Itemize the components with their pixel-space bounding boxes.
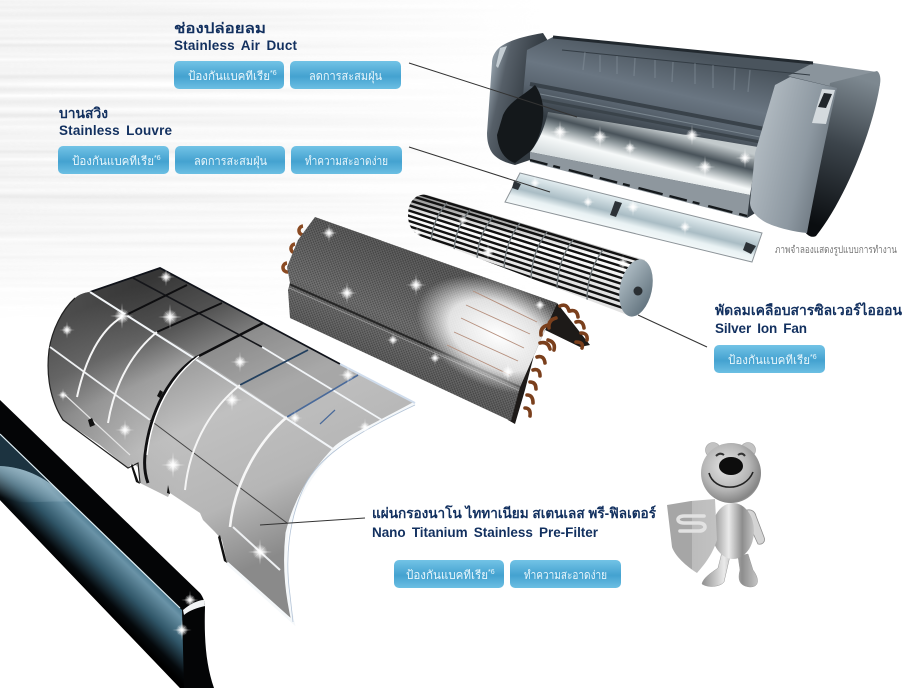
buttons: pre-filter benefits: ป้องกันแบคทีเรีย [406, 568, 488, 582]
end cap slot [812, 89, 835, 124]
end cap silver panel [750, 77, 837, 233]
louvre blade [505, 173, 762, 262]
heading: nano titanium stainless pre-filter: Nano Titanium Stainless Pre-Filter [372, 525, 599, 540]
panel black frame [0, 400, 214, 688]
coil rear tubes [283, 226, 304, 272]
heading: nano titanium stainless pre-filter: แผ่นกรองนาโน ไททาเนียม สเตนเลส พรี-ฟิลเตอร์ [372, 504, 656, 521]
heading: silver ion fan [715, 301, 902, 336]
shield S emblem [678, 516, 705, 531]
buttons: pre-filter benefits: ทำความสะอาดง่าย [524, 568, 607, 582]
buttons: louvre benefits: ป้องกันแบคทีเรีย [72, 154, 154, 168]
filter tabs [88, 390, 227, 563]
filter left shading [48, 268, 415, 622]
lower lip [530, 152, 750, 218]
left latch [496, 46, 507, 68]
bear head [701, 443, 761, 503]
buttons: louvre benefits: ทำความสะอาดง่าย [305, 154, 388, 168]
filter sparkles [57, 267, 373, 565]
bright air duct [530, 112, 758, 195]
coil dark side [508, 303, 590, 424]
filter mid upper panels [197, 323, 358, 417]
rear wall ribs and rim [530, 37, 813, 142]
panel blue face [0, 434, 184, 688]
left inner dark cavity [497, 85, 543, 163]
button: silver ion fan benefit: ป้องกันแบคทีเรีย [728, 353, 810, 367]
buttons: pre-filter benefits: *6 [488, 569, 495, 576]
front panel [0, 400, 214, 688]
filter dark upper panels [90, 268, 263, 357]
heading: stainless air duct: ช่องปล่อยลม [174, 20, 266, 36]
buttons: air duct benefits: *6 [270, 70, 277, 77]
fan ribs [431, 203, 603, 306]
heading: nano titanium stainless pre-filter [372, 504, 656, 540]
coil sparkles [320, 223, 547, 382]
bear body [712, 503, 754, 559]
filter mesh body [48, 268, 415, 622]
shield [667, 499, 717, 573]
heading: silver ion fan: Silver Ion Fan [715, 321, 807, 336]
panel light arc [0, 466, 70, 502]
panel dark upper blue wedge [0, 434, 62, 494]
end cap dark gloss [805, 71, 880, 237]
caption: ภาพจำลองแสดงรูปแบบการทำงาน [775, 245, 897, 256]
heading: silver ion fan: พัดลมเคลือบสารซิลเวอร์ไอออน [715, 301, 902, 318]
top rim right [788, 63, 877, 88]
buttons: air duct benefits: ลดการสะสมฝุ่น [309, 69, 382, 84]
duct sparkles [550, 121, 755, 178]
filter cross frame [77, 285, 358, 527]
fan drum [408, 194, 645, 314]
air conditioner housing with stainless air duct [487, 33, 880, 237]
fan blades [405, 190, 644, 311]
bear ears [706, 442, 756, 458]
louvre clips [512, 181, 756, 254]
bear smile [709, 472, 753, 487]
nano titanium stainless pre-filter [48, 267, 415, 622]
panel highlight [0, 434, 180, 608]
mascot: silver bear with shield [667, 442, 765, 587]
buttons: pre-filter benefits [394, 560, 621, 588]
stainless louvre [505, 173, 762, 262]
button: silver ion fan benefit [714, 345, 825, 373]
interior rear wall [520, 37, 880, 218]
fan end cap [614, 256, 658, 320]
buttons: air duct benefits: ป้องกันแบคทีเรีย [188, 69, 270, 83]
background: brushed metal streaks [0, 0, 351, 259]
fan hub [634, 286, 642, 296]
panel sparkles [172, 590, 199, 640]
silver ion fan [408, 194, 653, 317]
bear legs [702, 552, 758, 587]
heading: stainless air duct [174, 20, 298, 53]
filter lengthwise frame [50, 278, 382, 570]
coil fins [287, 217, 557, 421]
button: silver ion fan benefit: *6 [810, 354, 817, 361]
louvre sparkles [528, 175, 693, 236]
heading: stainless louvre [59, 105, 172, 138]
heading: stainless louvre: Stainless Louvre [59, 123, 172, 138]
heading: stainless air duct: Stainless Air Duct [174, 38, 298, 53]
leader lines [260, 63, 707, 525]
fan sparkles [410, 212, 631, 272]
buttons: louvre benefits [58, 146, 402, 174]
coil copper tubes [525, 305, 587, 416]
bear nose [719, 457, 743, 475]
heading: stainless louvre: บานสวิง [59, 105, 108, 121]
buttons: louvre benefits: ลดการสะสมฝุ่น [194, 154, 267, 169]
bear arm [747, 510, 765, 544]
filter outline [227, 403, 415, 622]
buttons: air duct benefits [174, 61, 401, 89]
buttons: louvre benefits: *6 [154, 155, 161, 162]
bear eyes [716, 454, 745, 456]
housing shell left side [487, 33, 560, 165]
heat exchanger coil [280, 210, 590, 425]
panel corner gloss [183, 600, 205, 615]
